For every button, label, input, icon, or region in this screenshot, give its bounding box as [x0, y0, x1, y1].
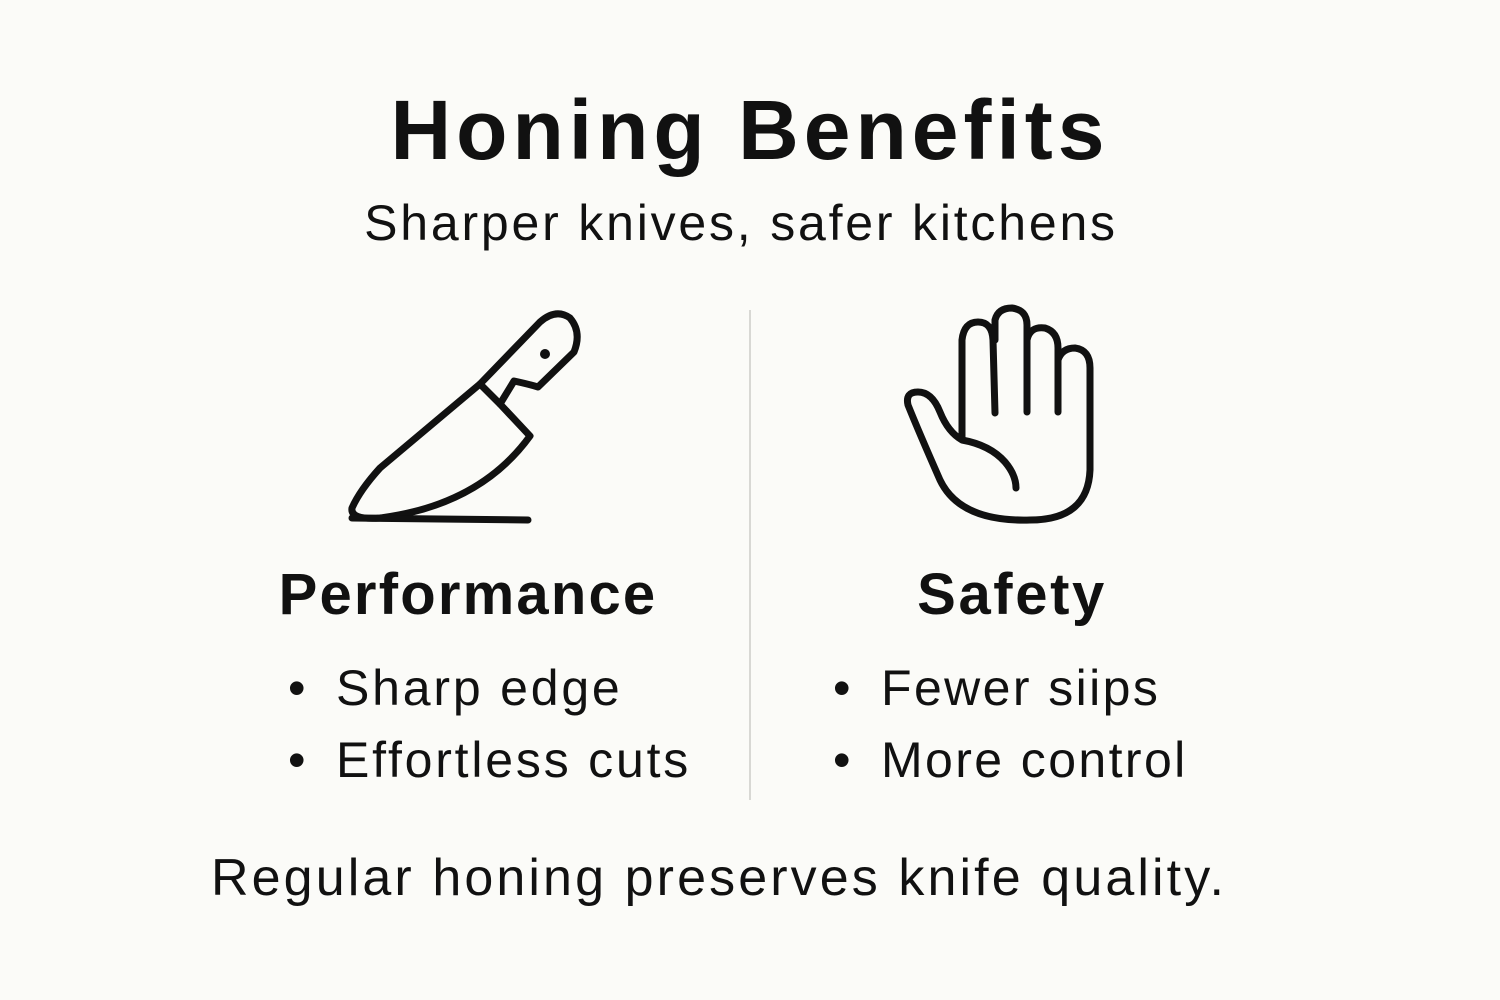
- list: performance: [288, 660, 691, 788]
- list: performance: •: [288, 732, 306, 788]
- list: safety: •: [833, 660, 851, 716]
- list: safety: •: [833, 732, 851, 788]
- list: safety: Fewer siips: [881, 660, 1160, 716]
- divider: [749, 310, 751, 800]
- subtitle: Sharper knives, safer kitchens: [364, 195, 1118, 251]
- list: safety: More control: [881, 732, 1188, 788]
- title: Honing Benefits: [390, 83, 1110, 177]
- list: performance: Sharp edge: [336, 660, 623, 716]
- list: performance: Effortless cuts: [336, 732, 691, 788]
- heading: Safety: Safety: [917, 562, 1107, 627]
- heading: Performance: Performance: [279, 562, 657, 627]
- footer: Regular honing preserves knife quality.: [211, 849, 1227, 907]
- list: safety: [833, 660, 1188, 788]
- list: performance: •: [288, 660, 306, 716]
